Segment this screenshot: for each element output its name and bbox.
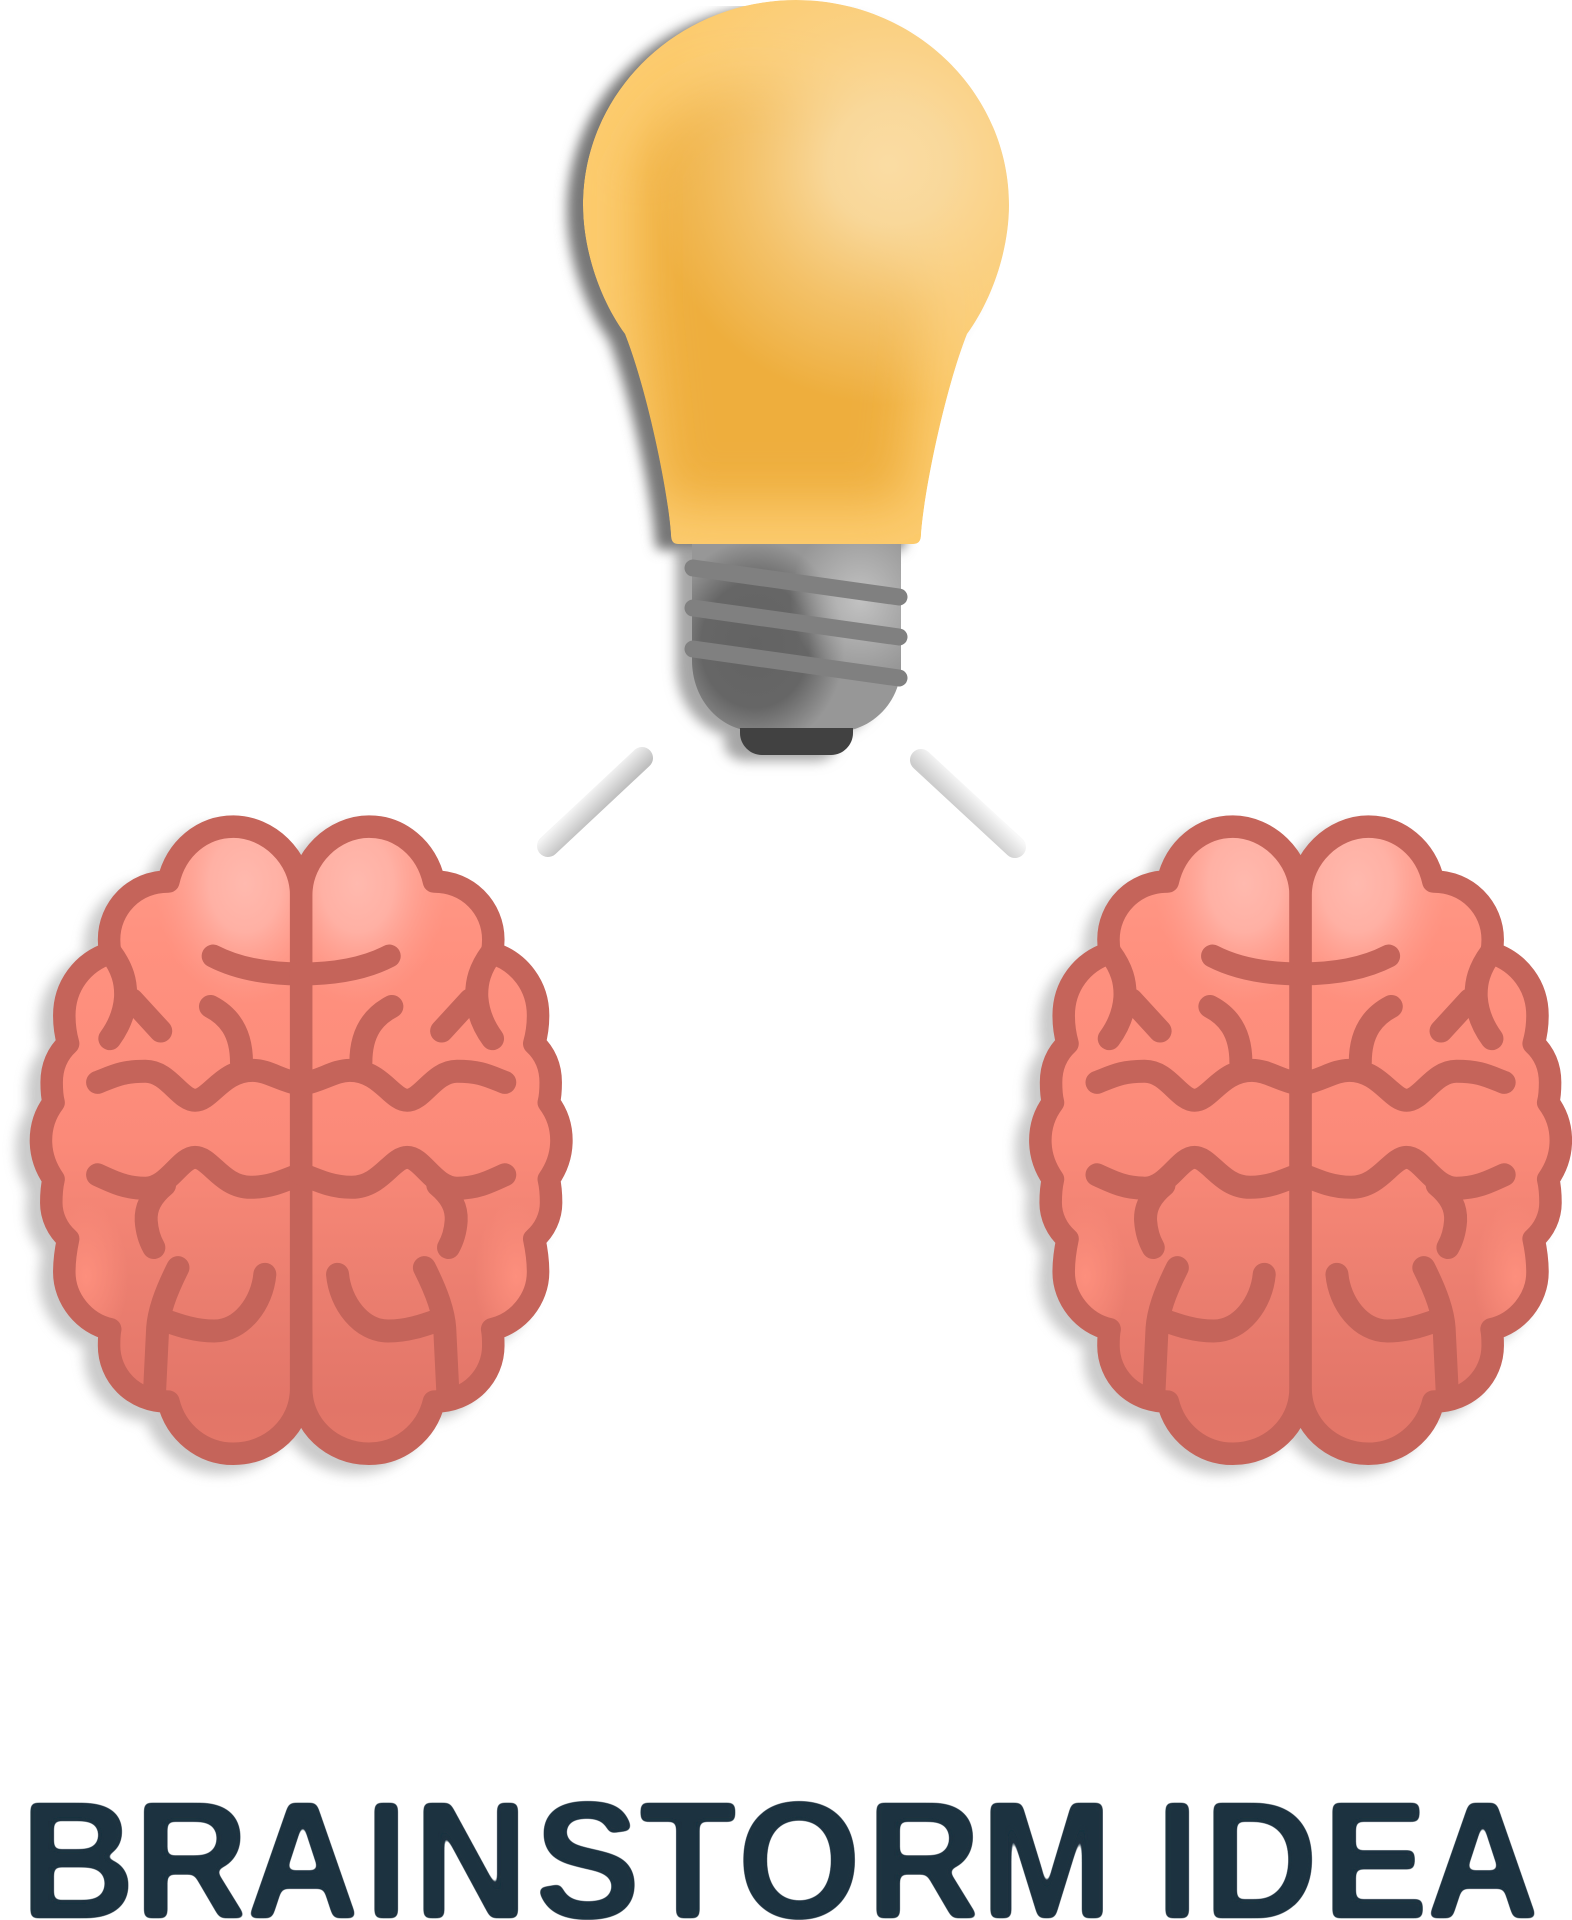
left brain shadow [27,836,547,1463]
base shadow [676,546,885,761]
light bulb [567,0,1012,761]
left brain [27,827,561,1463]
bulb glass [580,0,1012,545]
base metal [692,544,901,730]
left ray line [548,758,642,846]
right ray line [921,760,1015,847]
screw threads [693,568,899,678]
right brain [1026,827,1561,1463]
bulb shadow [567,6,993,550]
right brain drawing [1040,827,1561,1454]
screw base [685,535,905,735]
base contact tip [740,728,853,755]
left brain drawing [41,827,561,1454]
right brain shadow [1026,836,1547,1463]
